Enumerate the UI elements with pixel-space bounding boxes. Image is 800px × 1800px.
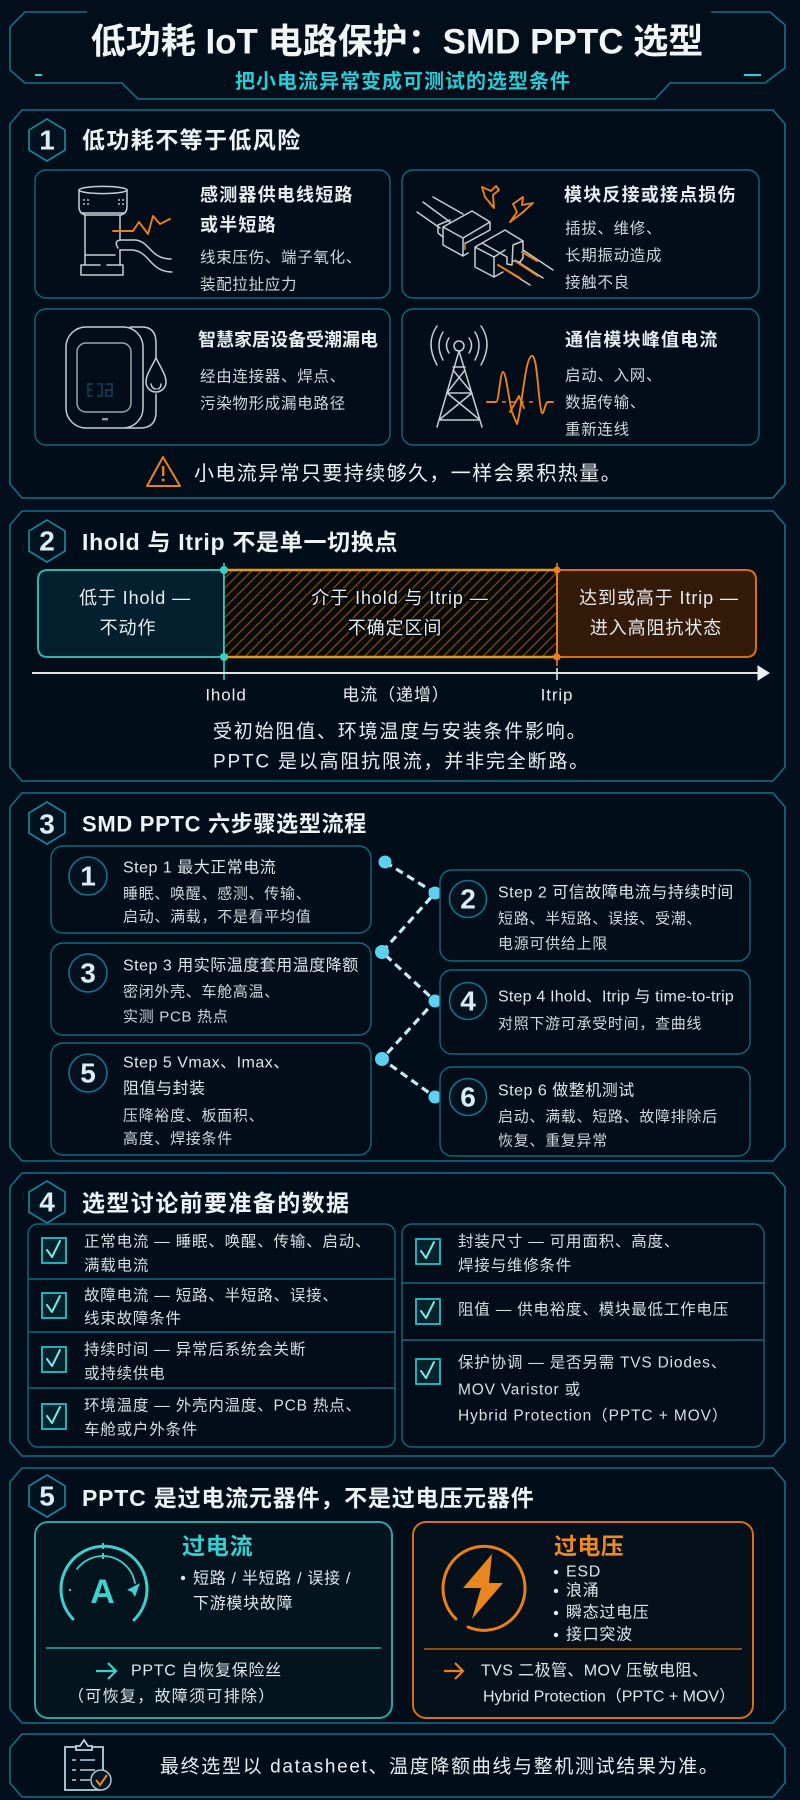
title: 低功耗 IoT 电路保护：SMD PPTC 选型: [91, 22, 703, 62]
step 2: 短路、半短路、误接、受潮、: [498, 910, 702, 928]
panel: footer note: [10, 1734, 785, 1797]
step 5: [51, 1043, 371, 1155]
icon: sensor with spark: [79, 186, 172, 275]
step 4: [440, 970, 750, 1054]
icon: radio tower and pulse: [431, 326, 553, 427]
overcurrent list: [181, 1570, 351, 1612]
section 3 number badge: 3: [39, 808, 55, 840]
check item: Hybrid Protection（PPTC + MOV）: [458, 1408, 728, 1424]
icon: lightning in ring: [443, 1546, 525, 1630]
section 5 number badge: [29, 1475, 65, 1517]
card title: 感测器供电线短路: [200, 185, 354, 205]
check item: [416, 1354, 728, 1424]
zone: uncertain range: 介于 Ihold 与 Itrip —: [311, 588, 489, 608]
icon: damaged connector: [417, 186, 553, 285]
overvoltage list: 瞬态过电压: [566, 1604, 650, 1622]
panel: section 2 ihold and itrip: [10, 511, 785, 781]
step 4: 4: [460, 986, 476, 1016]
check item: [416, 1299, 729, 1324]
icon: smart device with water drop: [66, 327, 166, 428]
check item: [42, 1232, 371, 1274]
card body: 重新连线: [565, 420, 630, 438]
overvoltage list: ESD: [566, 1564, 601, 1580]
card body: 插拔、维修、: [565, 220, 662, 238]
card body: 线束压伤、端子氧化、: [200, 248, 362, 266]
step 6: 6: [460, 1082, 476, 1112]
zone: uncertain range: 不确定区间: [348, 618, 442, 638]
card body: [200, 368, 346, 412]
header frame: [10, 12, 785, 99]
zone: above itrip: [557, 570, 756, 657]
overcurrent result: PPTC 自恢复保险丝: [131, 1662, 282, 1680]
section 4 heading: 选型讨论前要准备的数据: [82, 1190, 350, 1216]
step 1: 启动、满载，不是看平均值: [123, 908, 311, 926]
card body: 启动、入网、: [565, 366, 662, 384]
card body: 经由连接器、焊点、: [200, 368, 346, 386]
subtitle: 把小电流异常变成可测试的选型条件: [235, 69, 571, 93]
axis labels: 电流（递增）: [342, 686, 450, 704]
check item: 线束故障条件: [84, 1310, 182, 1328]
section 2 heading: Ihold 与 Itrip 不是单一切换点: [82, 529, 398, 555]
footer text: 最终选型以 datasheet、温度降额曲线与整机测试结果为准。: [160, 1756, 720, 1778]
overcurrent title: 过电流: [182, 1533, 253, 1559]
callout: warning: [147, 457, 622, 486]
zone: above itrip: 进入高阻抗状态: [590, 618, 722, 638]
step 1: Step 1 最大正常电流: [123, 858, 276, 876]
step 3: [51, 943, 371, 1035]
card: radio module peak current: [402, 309, 759, 445]
section 1 heading: 低功耗不等于低风险: [82, 127, 302, 153]
check item: 环境温度 — 外壳内温度、PCB 热点、: [84, 1396, 362, 1414]
check item: [42, 1340, 306, 1382]
card body: [565, 220, 662, 292]
axis labels: Ihold: [205, 686, 247, 704]
card: module reverse connection: [402, 170, 759, 298]
card body: 装配拉扯应力: [200, 274, 297, 294]
overvoltage list: 接口突波: [566, 1626, 633, 1644]
check item: [42, 1396, 362, 1438]
step 6: 启动、满载、短路、故障排除后: [498, 1108, 718, 1126]
callout: warning: 小电流异常只要持续够久，一样会累积热量。: [194, 462, 622, 485]
step 5: 压降裕度、板面积、: [123, 1106, 264, 1124]
note: [213, 720, 590, 772]
zone: below ihold: 低于 Ihold —: [79, 588, 191, 608]
check item: [42, 1286, 339, 1328]
card body: 污染物形成漏电路径: [200, 394, 346, 412]
step 4: Step 4 Ihold、Itrip 与 time-to-trip: [498, 988, 734, 1006]
section 4 number badge: 4: [39, 1186, 55, 1218]
step 6: Step 6 做整机测试: [498, 1082, 635, 1100]
step 1: 睡眠、唤醒、感测、传输、: [123, 886, 311, 902]
check item: 故障电流 — 短路、半短路、误接、: [84, 1286, 339, 1304]
card body: [200, 248, 362, 294]
card: sensor short circuit: [35, 170, 390, 298]
panel: section 5 overcurrent vs overvoltage: [10, 1468, 785, 1723]
marker: ihold: [220, 563, 228, 680]
arrow: [96, 1663, 116, 1679]
checklist right: [402, 1224, 764, 1447]
section 4 number badge: [29, 1181, 65, 1223]
step 5: 5: [80, 1058, 96, 1088]
card body: 接触不良: [565, 274, 630, 292]
check item: 阻值 — 供电裕度、模块最低工作电压: [458, 1300, 729, 1318]
overvoltage result: Hybrid Protection（PPTC + MOV）: [483, 1688, 735, 1706]
step 1: 1: [80, 860, 96, 892]
check item: 封装尺寸 — 可用面积、高度、: [458, 1232, 680, 1250]
check item: 车舱或户外条件: [84, 1420, 198, 1438]
zone: above itrip: 达到或高于 Itrip —: [579, 588, 739, 608]
step 2: 电源可供给上限: [498, 936, 608, 952]
section 5 number badge: 5: [39, 1480, 55, 1512]
axis labels: Itrip: [541, 686, 573, 704]
marker: itrip: [553, 563, 561, 680]
icon: ammeter gauge: A: [90, 1573, 115, 1611]
step 5: 阻值与封装: [123, 1080, 206, 1098]
panel: section 1 low power risk: [10, 110, 785, 498]
icon: clipboard with check: [65, 1740, 111, 1790]
check item: 焊接与维修条件: [458, 1256, 572, 1274]
section 1 number badge: [29, 119, 65, 161]
card body: 长期振动造成: [565, 246, 662, 264]
overcurrent list: 下游模块故障: [193, 1594, 293, 1612]
check item: MOV Varistor 或: [458, 1380, 581, 1398]
check item: 正常电流 — 睡眠、唤醒、传输、启动、: [84, 1232, 371, 1250]
note: PPTC 是以高阻抗限流，并非完全断路。: [213, 750, 590, 772]
arrow: [444, 1663, 463, 1679]
checklist left: [28, 1224, 395, 1447]
step 3: Step 3 用实际温度套用温度降额: [123, 956, 359, 974]
check item: 保护协调 — 是否另需 TVS Diodes、: [458, 1354, 727, 1372]
check item: 或持续供电: [84, 1364, 166, 1382]
note: 受初始阻值、环境温度与安装条件影响。: [213, 720, 587, 742]
check item: 满载电流: [84, 1256, 149, 1274]
card title: 通信模块峰值电流: [565, 330, 719, 350]
icon: ammeter gauge: [61, 1543, 147, 1620]
card title: 模块反接或接点损伤: [564, 184, 737, 205]
section 2 number badge: 2: [39, 526, 55, 556]
check item: 持续时间 — 异常后系统会关断: [84, 1340, 306, 1358]
check item: [416, 1232, 680, 1274]
step 2: Step 2 可信故障电流与持续时间: [498, 884, 734, 902]
step 6: 恢复、重复异常: [498, 1132, 608, 1150]
step 2: 2: [460, 884, 476, 914]
card body: 数据传输、: [565, 394, 646, 412]
step 5: Step 5 Vmax、Imax、: [123, 1054, 290, 1072]
connector: dashed flow: [375, 856, 442, 1104]
card title: 或半短路: [200, 214, 277, 235]
zone: uncertain range: [224, 570, 557, 657]
step 1: [51, 846, 371, 933]
step 6: [440, 1067, 750, 1156]
card body: [565, 366, 662, 438]
step 3: 3: [80, 958, 96, 988]
panel: section 3 six steps: [10, 793, 785, 1161]
step 3: 实测 PCB 热点: [123, 1008, 228, 1026]
axis labels: [205, 686, 573, 704]
overvoltage list: 浪涌: [566, 1582, 599, 1600]
section 3 number badge: [29, 802, 65, 844]
section 1 number badge: 1: [39, 124, 55, 156]
overvoltage result: [481, 1662, 735, 1706]
step 5: 高度、焊接条件: [123, 1130, 233, 1148]
axis arrow: [32, 666, 769, 680]
panel: section 4 data checklist: [10, 1173, 785, 1456]
overvoltage list: [554, 1564, 650, 1644]
card: overvoltage: [413, 1522, 753, 1718]
card: smart home moisture leakage: [35, 309, 390, 445]
overvoltage title: 过电压: [554, 1533, 624, 1559]
card: overcurrent: [35, 1522, 392, 1718]
zone: below ihold: 不动作: [100, 618, 156, 638]
section 2 number badge: [29, 520, 65, 562]
overcurrent result: [68, 1662, 282, 1706]
step 4: 对照下游可承受时间，查曲线: [498, 1016, 702, 1032]
card title: [200, 185, 354, 235]
section 5 heading: PPTC 是过电流元器件，不是过电压元器件: [82, 1485, 535, 1511]
zone: below ihold: [38, 570, 224, 657]
step 2: [440, 870, 750, 961]
overvoltage result: TVS 二极管、MOV 压敏电阻、: [481, 1662, 708, 1680]
card title: 智慧家居设备受潮漏电: [198, 329, 378, 350]
step 3: 密闭外壳、车舱高温、: [123, 984, 280, 1000]
section 3 heading: SMD PPTC 六步骤选型流程: [82, 812, 367, 836]
overcurrent result: （可恢复，故障须可排除）: [68, 1688, 276, 1706]
overcurrent list: 短路 / 半短路 / 误接 /: [193, 1570, 351, 1588]
icon: warning triangle: [147, 457, 180, 486]
